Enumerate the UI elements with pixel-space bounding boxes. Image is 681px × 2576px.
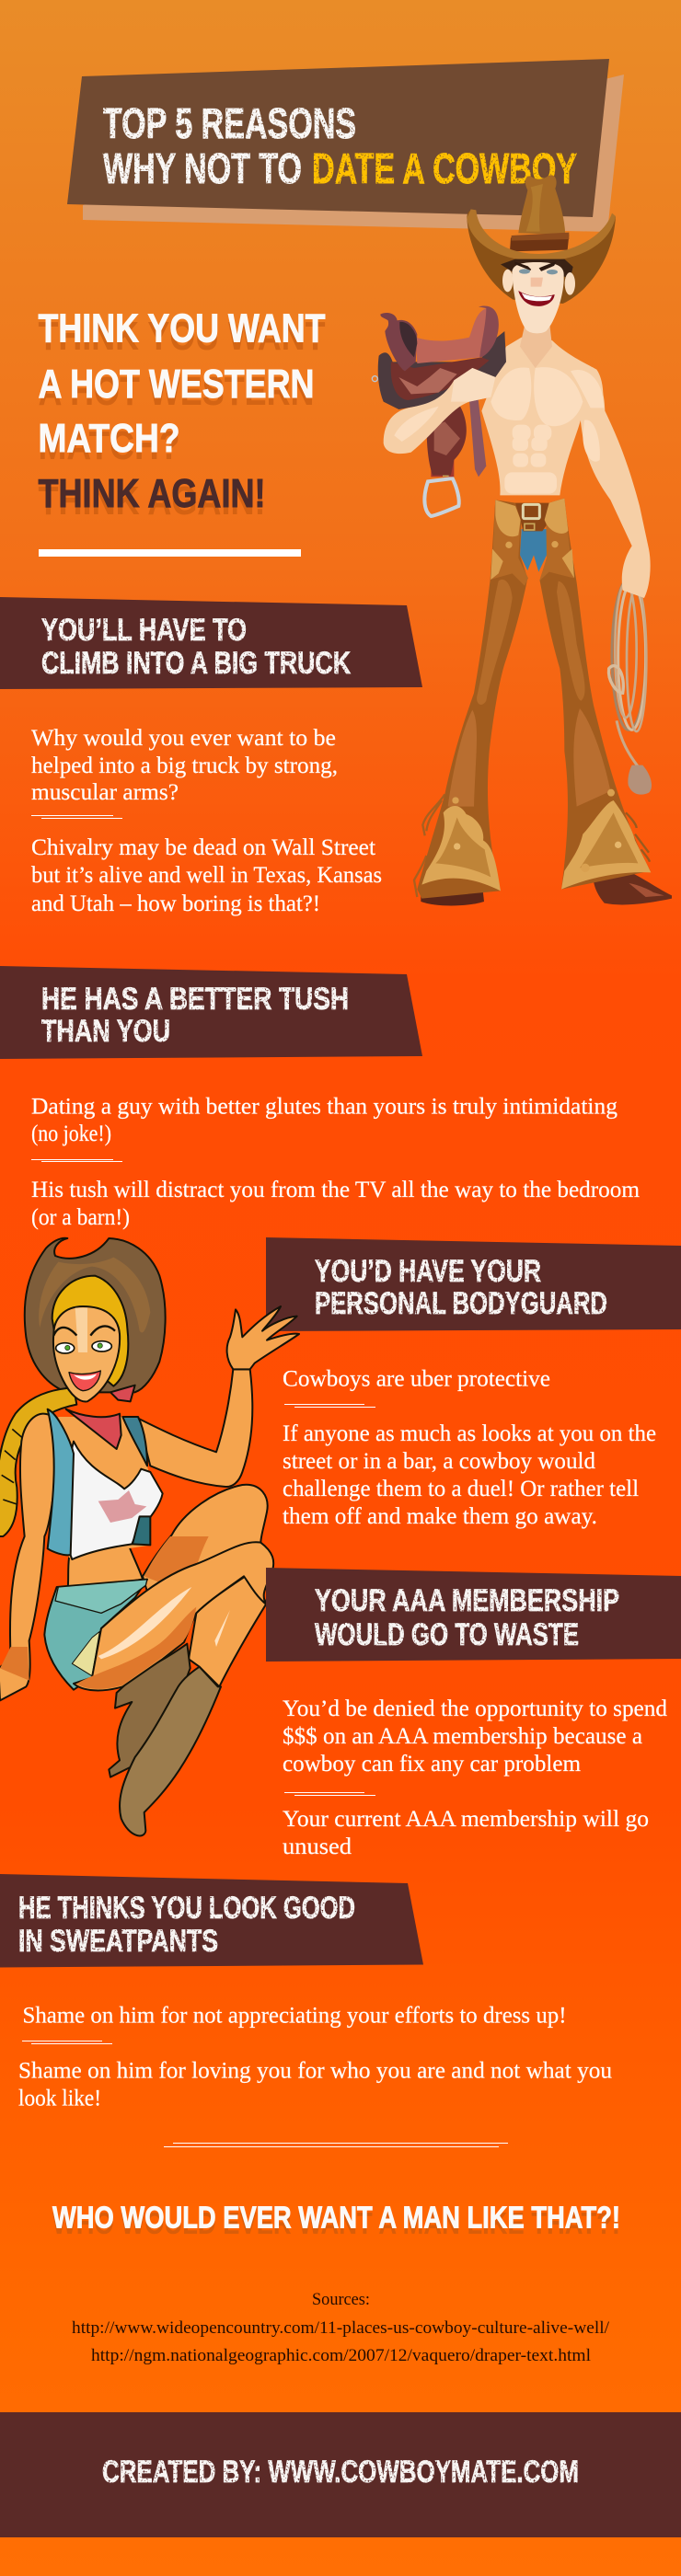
body copy	[18, 2004, 612, 2110]
body copy	[283, 1696, 667, 1859]
heading	[315, 1254, 607, 1321]
sources: http://ngm.nationalgeographic.com/2007/12/vaquero/draper-text.html	[91, 2346, 591, 2365]
body copy: helped into a big truck by strong,	[31, 753, 338, 778]
headline: think you want a hot western match: THINK YOU WANT	[39, 305, 326, 351]
panel: better tush	[0, 966, 641, 1230]
body copy: Chivalry may be dead on Wall Street	[31, 835, 375, 860]
banner	[0, 1874, 423, 1967]
panel: AAA membership	[266, 1568, 681, 1859]
title text: WHY NOT TO	[103, 144, 302, 192]
body copy: them off and make them go away.	[283, 1504, 597, 1529]
sources: http://www.wideopencountry.com/11-places-us-cowboy-culture-alive-well/	[72, 2318, 610, 2338]
headline: think you want a hot western match: THINK YOU WANT	[39, 314, 326, 359]
heading: HE HAS A BETTER TUSH	[41, 982, 349, 1017]
heading: HE THINKS YOU LOOK GOOD	[18, 1891, 355, 1926]
body copy	[283, 1367, 656, 1529]
heading: WOULD GO TO WASTE	[315, 1617, 579, 1652]
body copy: $$$ on an AAA membership because a	[283, 1724, 642, 1749]
body copy: unused	[283, 1834, 352, 1859]
body copy: cowboy can fix any car problem	[283, 1752, 582, 1777]
body copy: Cowboys are uber protective	[283, 1367, 550, 1391]
headline: think you want a hot western match	[39, 305, 326, 523]
panel: bodyguard copy	[283, 1254, 656, 1529]
footer	[0, 2412, 681, 2537]
title text: TOP 5 REASONS	[103, 99, 356, 147]
body copy: Shame on him for not appreciating your efforts to dress up!	[22, 2004, 567, 2028]
heading: YOU’D HAVE YOUR	[315, 1254, 541, 1289]
illustration: cowboy	[372, 175, 672, 905]
cowgirl midriff	[67, 1546, 143, 1592]
heading	[41, 613, 351, 681]
body copy: (or a barn!)	[31, 1205, 130, 1230]
body copy	[31, 726, 382, 916]
body copy: but it’s alive and well in Texas, Kansas	[31, 863, 382, 888]
panel: bodyguard banner	[266, 1237, 681, 1331]
body copy: Why would you ever want to be	[31, 726, 336, 751]
cowgirl legs and boots	[44, 1542, 273, 1835]
title text: DATE A COWBOY	[312, 144, 577, 192]
cowgirl back leg	[143, 1485, 268, 1601]
title text	[103, 99, 577, 192]
body copy: challenge them to a duel! Or rather tell	[283, 1477, 639, 1501]
body copy: You’d be denied the opportunity to spend	[283, 1696, 667, 1721]
heading: IN SWEATPANTS	[18, 1924, 218, 1959]
headline: think you want a hot western match: THINK AGAIN!	[39, 478, 265, 523]
white bar	[39, 549, 301, 557]
cowboy torso and head	[372, 175, 651, 598]
body copy: If anyone as much as looks at you on the	[283, 1421, 656, 1446]
body copy: Your current AAA membership will go	[283, 1807, 649, 1832]
illustration: cowgirl	[0, 1238, 299, 1835]
closing divider	[164, 2143, 508, 2147]
panel: sweatpants	[0, 1874, 612, 2110]
body copy: Shame on him for loving you for who you are and not what you	[18, 2059, 612, 2083]
banner	[0, 966, 422, 1059]
heading: CLIMB INTO A BIG TRUCK	[41, 646, 351, 681]
body copy: muscular arms?	[31, 780, 179, 805]
headline: think you want a hot western match: A HOT WESTERN	[39, 369, 315, 414]
body copy: look like!	[18, 2087, 101, 2110]
banner	[266, 1568, 681, 1662]
sources	[72, 2290, 610, 2365]
headline: think you want a hot western match: MATCH?	[39, 423, 180, 468]
title plate face	[67, 59, 609, 217]
banner	[0, 597, 422, 689]
title plate	[67, 59, 624, 232]
body copy: Dating a guy with better glutes than yours is truly intimidating	[31, 1095, 618, 1119]
cowboy legs and rope	[414, 460, 672, 905]
heading: YOU’LL HAVE TO	[41, 613, 247, 648]
cowgirl upper body	[0, 1238, 299, 1700]
body copy: and Utah – how boring is that?!	[31, 891, 320, 916]
heading	[41, 982, 349, 1049]
heading	[18, 1891, 355, 1959]
heading	[315, 1583, 619, 1652]
body copy: (no joke!)	[31, 1121, 111, 1146]
headline: think you want a hot western match: MATCH?	[39, 416, 180, 461]
footer band	[0, 2412, 681, 2537]
sources: Sources:	[312, 2290, 370, 2309]
headline: think you want a hot western match: A HOT WESTERN	[39, 362, 315, 407]
headline: think you want a hot western match: THINK AGAIN!	[39, 471, 265, 516]
panel: big truck	[0, 597, 422, 916]
title plate shadow	[83, 75, 624, 232]
body copy: street or in a bar, a cowboy would	[283, 1449, 595, 1474]
cowgirl leg shadow	[144, 1536, 209, 1582]
body copy: His tush will distract you from the TV all the way to the bedroom	[31, 1178, 641, 1202]
heading: THAN YOU	[41, 1014, 170, 1049]
body copy	[31, 1095, 641, 1230]
